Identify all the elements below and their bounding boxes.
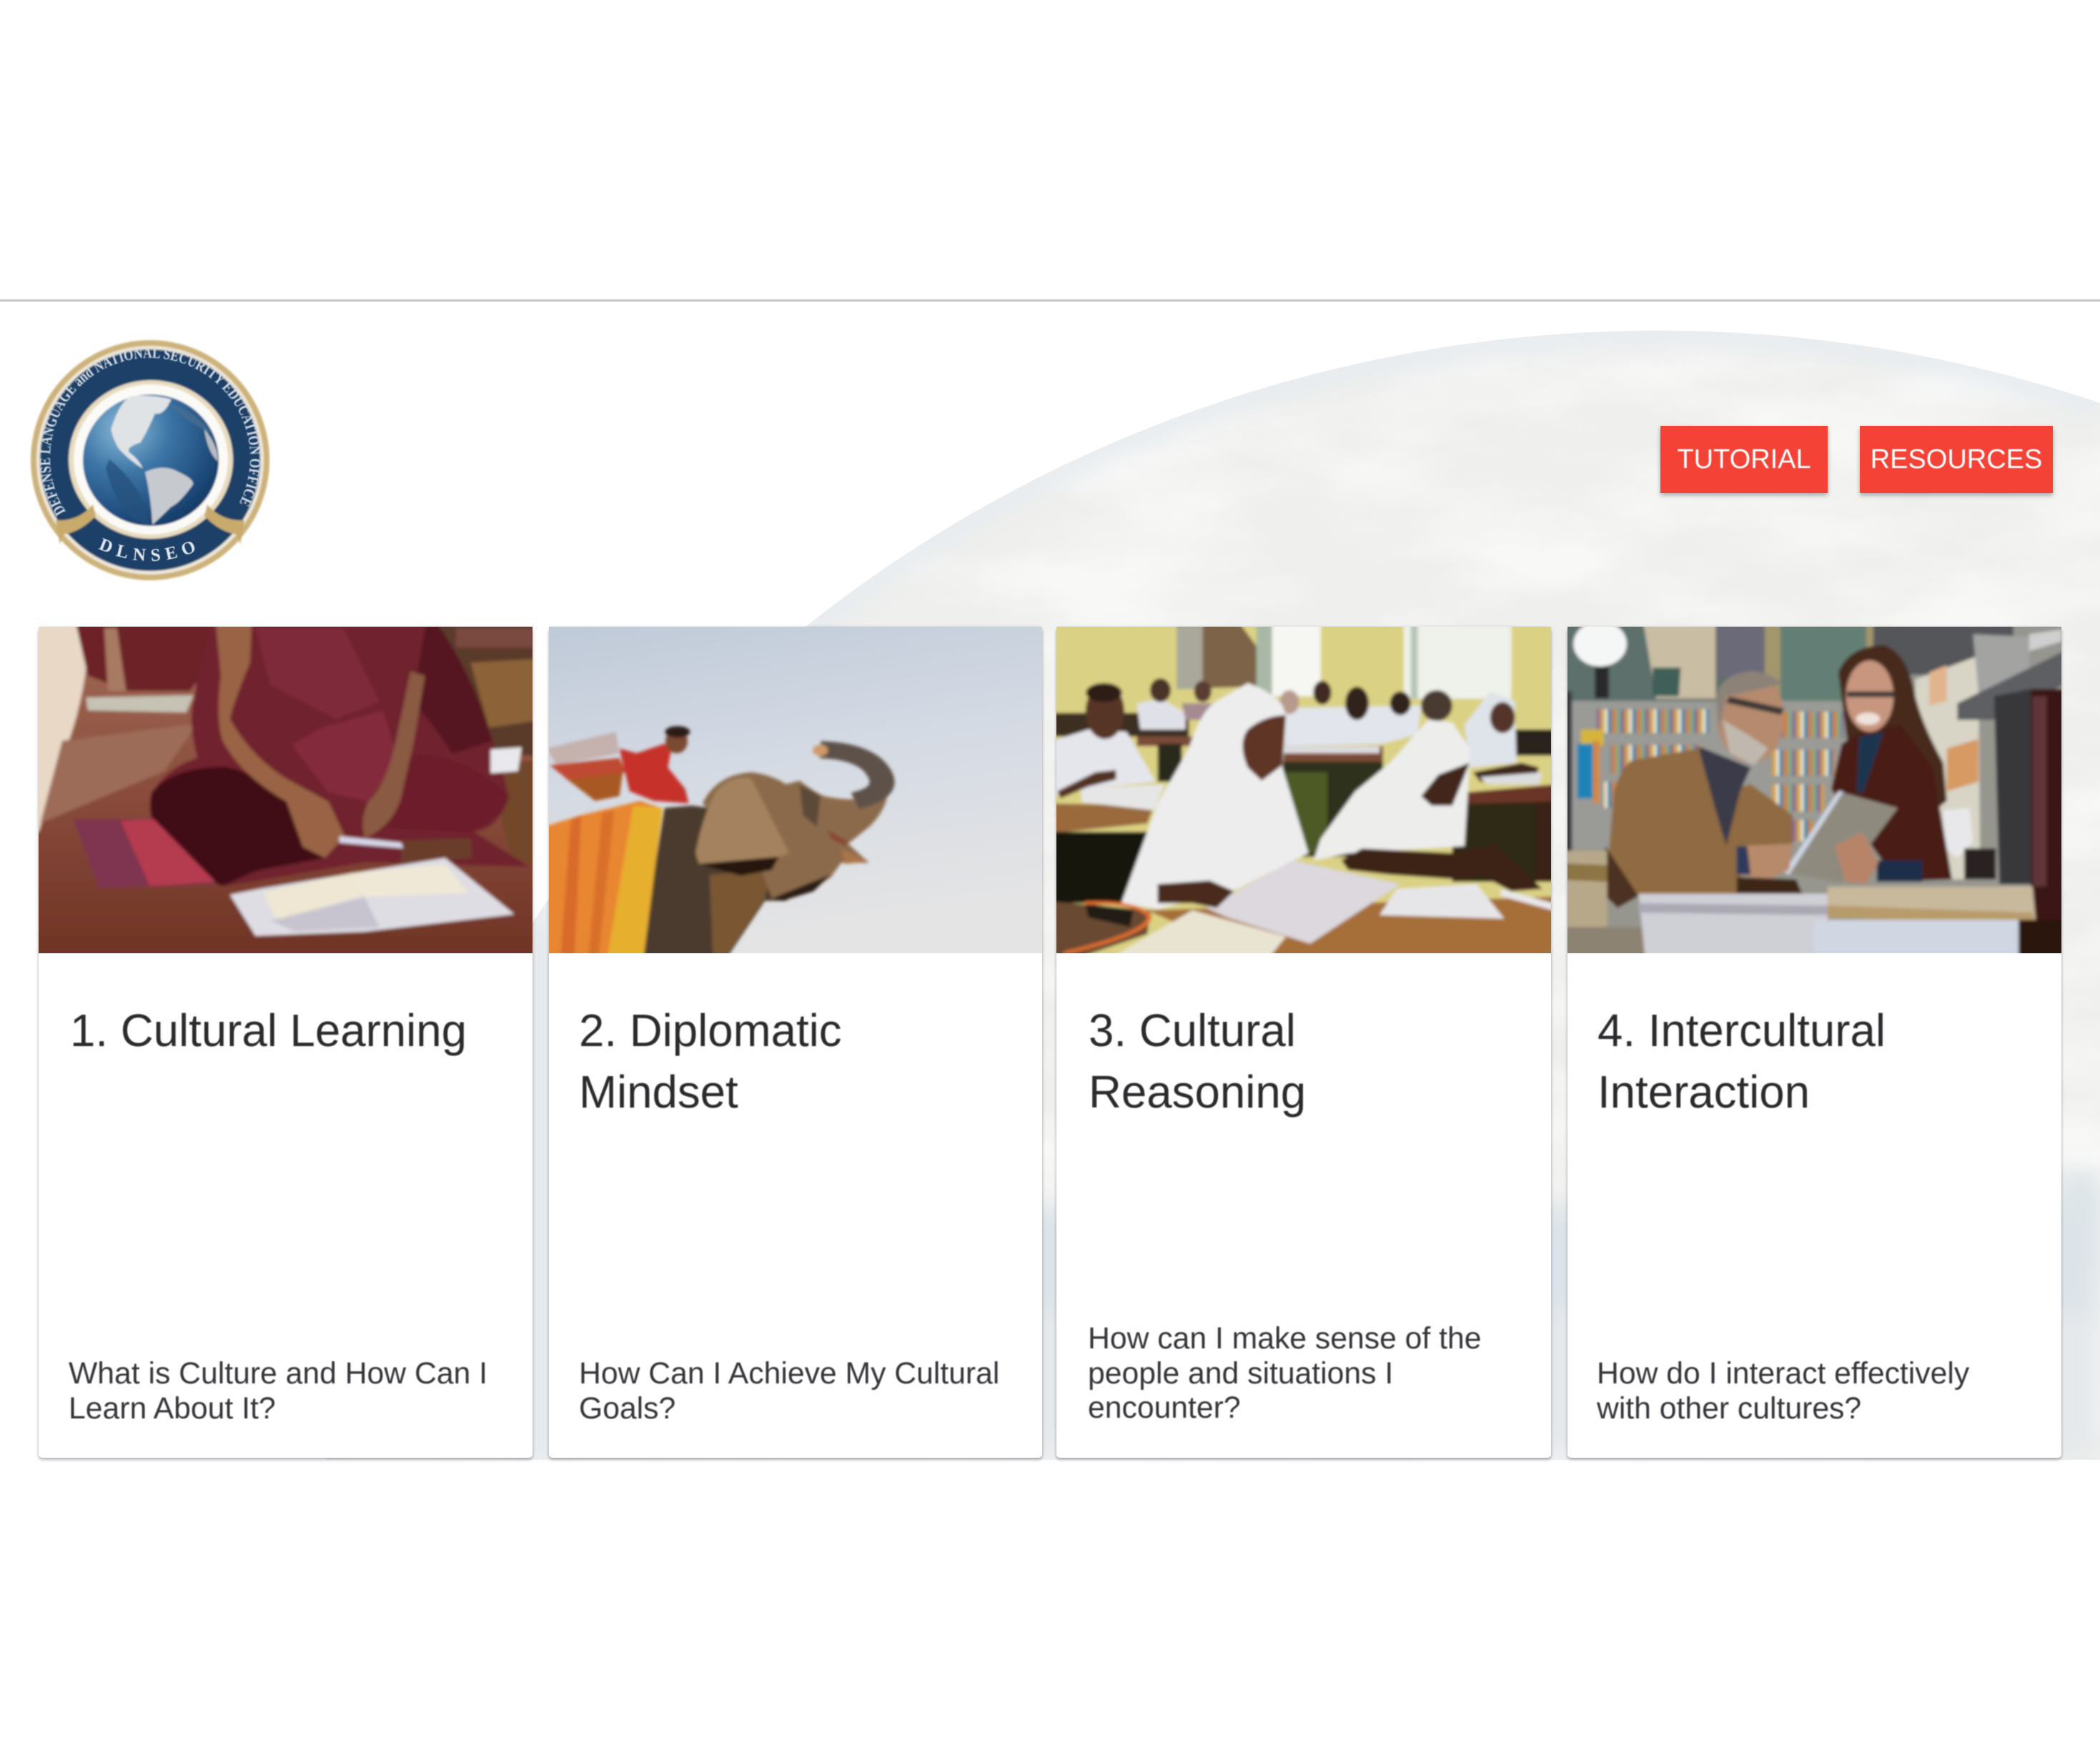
card description: How Can I Achieve My Cultural — [579, 1356, 999, 1391]
logo: DLNSEO seal — [29, 339, 271, 582]
card heading: 4. Intercultural — [1598, 1005, 1886, 1056]
card description — [579, 1356, 999, 1425]
card description: Learn About It? — [69, 1391, 276, 1425]
button: tutorial — [1660, 426, 1828, 493]
card heading — [1598, 1005, 1886, 1118]
card description: How do I interact effectively — [1597, 1356, 1969, 1391]
photo: students in classroom — [1056, 627, 1551, 953]
card 1: Cultural Learning — [39, 627, 533, 1458]
card description — [68, 1356, 487, 1425]
background globe — [327, 330, 2100, 1460]
button: tutorial: TUTORIAL — [1677, 444, 1811, 474]
card heading: 3. Cultural — [1089, 1005, 1296, 1056]
photo: teacher and student with tablet in library — [1567, 627, 2061, 953]
card description — [1596, 1356, 1970, 1425]
card heading — [579, 1005, 842, 1118]
card heading — [1089, 1005, 1306, 1118]
card 2: Diplomatic Mindset — [549, 627, 1042, 1458]
card description: What is Culture and How Can I — [69, 1356, 487, 1391]
photo: monk reading on floor — [39, 627, 533, 953]
card description: people and situations I — [1088, 1356, 1393, 1391]
card heading: 1. Cultural Learning — [70, 1005, 467, 1056]
header divider line — [0, 299, 2100, 302]
globe land — [106, 396, 218, 526]
card heading: 2. Diplomatic — [579, 1005, 842, 1056]
seal ring text: DEFENSE LANGUAGE and NATIONAL SECURITY EDUCATION OFFICE — [39, 347, 261, 517]
seal bottom text: DLNSEO — [98, 537, 195, 562]
card heading: Reasoning — [1089, 1067, 1306, 1118]
card 3: Cultural Reasoning — [1056, 627, 1551, 1458]
card description: with other cultures? — [1597, 1391, 1861, 1425]
button: resources — [1860, 426, 2053, 493]
card description — [1088, 1321, 1481, 1425]
button: resources: RESOURCES — [1871, 444, 2042, 474]
photo: elephant and rider — [549, 627, 1042, 953]
card 4: Intercultural Interaction — [1567, 627, 2061, 1458]
card description: How can I make sense of the — [1088, 1321, 1481, 1356]
card description: Goals? — [579, 1391, 675, 1425]
card heading: Mindset — [579, 1067, 738, 1118]
card description: encounter? — [1088, 1391, 1241, 1425]
card heading: Interaction — [1598, 1067, 1810, 1118]
